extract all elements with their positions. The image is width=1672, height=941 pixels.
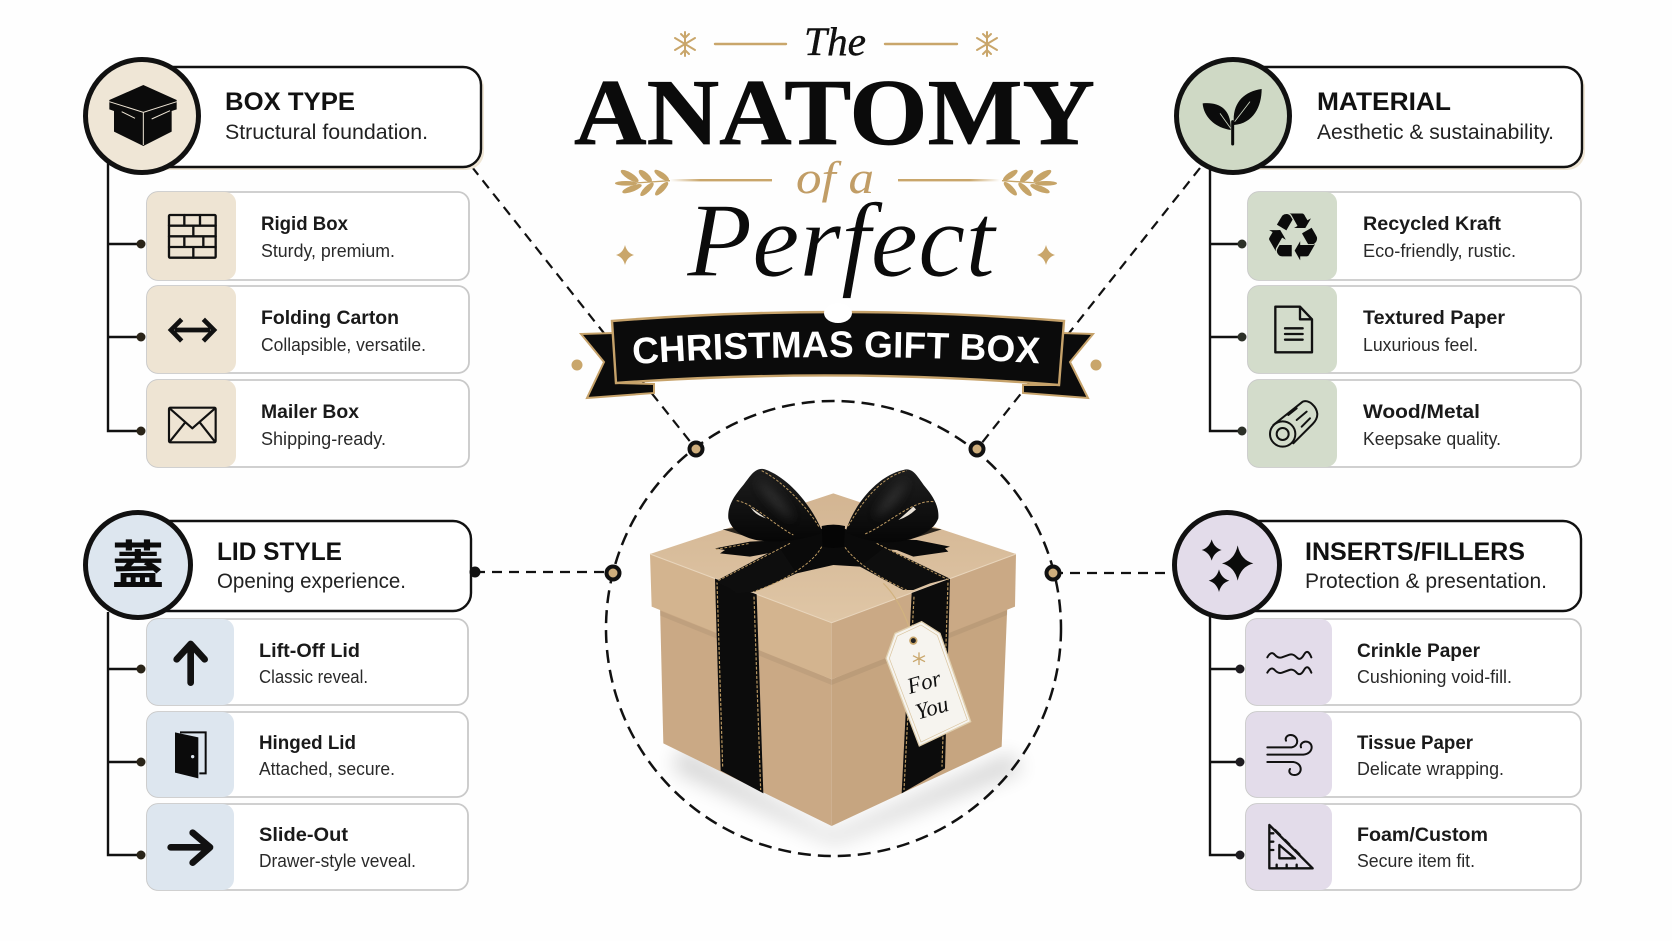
item: crinkle paper: Crinkle Paper	[1357, 640, 1480, 662]
banner: left dot	[572, 360, 582, 370]
box body left face	[660, 605, 832, 826]
icon circle	[86, 60, 198, 172]
title: ANATOMY: ANATOMY	[574, 61, 1095, 165]
bow group	[715, 469, 950, 593]
ornament: left bauble	[616, 245, 634, 265]
item: hinged lid	[136, 712, 468, 797]
header shadow	[150, 70, 484, 170]
item: rigid box: Rigid Box	[261, 213, 348, 235]
ornament: left laurel	[615, 168, 670, 198]
ornament: right snowflake	[977, 32, 997, 56]
item: folding carton: Collapsible, versatile.	[261, 335, 426, 355]
tag: You: You	[913, 691, 951, 724]
ribbon: stitching on faces	[717, 582, 948, 790]
item: foam custom: Foam/Custom	[1357, 824, 1488, 846]
heading: MATERIAL	[1317, 88, 1451, 116]
connector nodes	[606, 442, 1060, 580]
item: rigid box	[136, 192, 469, 280]
item: tissue paper: Tissue Paper	[1357, 732, 1473, 754]
item: crinkle paper: Cushioning void-fill.	[1357, 667, 1512, 687]
icon circle	[86, 512, 190, 618]
bow: back band	[723, 525, 942, 541]
subheading: Protection & presentation.	[1305, 570, 1547, 593]
item: lift-off lid	[136, 619, 468, 705]
item: wood metal: Wood/Metal	[1363, 401, 1480, 423]
connector dot	[470, 566, 480, 578]
icon: sparkles	[1202, 539, 1253, 592]
item: recycled kraft: Recycled Kraft	[1363, 213, 1502, 235]
connector: inserts to gift circle	[1053, 572, 1172, 574]
header card	[1227, 521, 1581, 611]
banner: notch behind script	[824, 303, 852, 323]
node: right	[1046, 566, 1060, 580]
item: mailer box: Mailer Box	[261, 401, 359, 423]
header card	[142, 67, 481, 167]
banner: left tail	[581, 333, 654, 398]
dashed circle around gift	[606, 401, 1061, 856]
title: The: The	[804, 19, 866, 64]
lid top face	[650, 493, 1016, 623]
lid left skirt	[650, 554, 832, 679]
ribbon: left face band	[715, 579, 763, 793]
ornament: right laurel rule	[898, 179, 1000, 181]
ornament: right bauble	[1037, 245, 1055, 265]
item: textured paper	[1238, 286, 1581, 373]
bow: right band	[843, 543, 949, 590]
item: textured paper: Luxurious feel.	[1363, 335, 1478, 355]
bow: left tail	[715, 538, 820, 557]
item: wood metal	[1238, 380, 1581, 467]
node: top right	[970, 442, 984, 456]
item: lift-off lid: Classic reveal.	[259, 667, 368, 687]
item: foam custom: Secure item fit.	[1357, 851, 1475, 871]
banner: right tail	[1023, 333, 1093, 398]
item: mailer box	[136, 380, 469, 467]
heading: BOX TYPE	[225, 88, 355, 116]
item: rigid box: Sturdy, premium.	[261, 241, 395, 261]
item: recycled kraft	[1238, 192, 1581, 280]
item: tissue paper	[1236, 712, 1581, 797]
banner: body	[612, 312, 1064, 385]
bow: knot	[822, 525, 845, 548]
bow: left band	[715, 540, 823, 593]
item: crinkle paper	[1236, 619, 1581, 705]
title block	[574, 19, 1095, 265]
tag: For: For	[903, 665, 944, 699]
subheading: Aesthetic & sustainability.	[1317, 121, 1554, 144]
bow: stitching	[716, 471, 950, 592]
panel: inserts and fillers	[1174, 512, 1581, 890]
icon: box	[109, 85, 177, 146]
ribbon: right face band	[902, 579, 950, 793]
item: slide-out: Drawer-style veveal.	[259, 851, 416, 871]
branch lines	[1210, 160, 1242, 431]
banner: right dot	[1090, 360, 1102, 370]
bow: center backing	[777, 528, 890, 573]
tag: string	[883, 583, 913, 637]
lid edge highlight	[650, 554, 1016, 623]
branch lines	[108, 160, 141, 431]
connector: box type to gift circle	[472, 167, 696, 449]
panel: lid style	[86, 512, 480, 890]
box body right face	[832, 605, 1007, 826]
bow: right loop	[847, 469, 938, 542]
banner	[572, 310, 1102, 400]
box shadow	[673, 747, 1023, 843]
item: hinged lid: Hinged Lid	[259, 732, 356, 754]
bow: loop shine	[757, 480, 907, 520]
item: folding carton	[136, 286, 469, 373]
item: recycled kraft: Eco-friendly, rustic.	[1363, 241, 1516, 261]
ornament: right rule	[885, 43, 957, 45]
item: wood metal: Keepsake quality.	[1363, 429, 1501, 449]
lid right skirt	[832, 554, 1016, 679]
subheading: Opening experience.	[217, 570, 406, 593]
bow: right tail	[847, 538, 950, 557]
header shadow	[1240, 70, 1585, 170]
bow: loop openings	[751, 507, 916, 520]
item: slide-out: Slide-Out	[259, 824, 349, 846]
icon circle	[1174, 512, 1280, 618]
item: recycled kraft: ♻	[1263, 199, 1323, 276]
item: textured paper: Textured Paper	[1363, 307, 1505, 329]
item: folding carton: Folding Carton	[261, 307, 399, 329]
connector: material to gift circle	[977, 168, 1200, 449]
banner: text: CHRISTMAS GIFT BOX	[634, 331, 1040, 364]
gift box illustration	[650, 469, 1023, 843]
branch lines	[108, 612, 141, 855]
branch lines	[1210, 612, 1240, 855]
ornament: left rule	[715, 43, 786, 45]
header card	[1233, 67, 1582, 167]
lid undershadow	[660, 610, 1007, 685]
item: slide-out	[136, 804, 468, 890]
item: lift-off lid: Lift-Off Lid	[259, 640, 360, 662]
item: mailer box: Shipping-ready.	[261, 429, 386, 449]
ornament: left laurel rule	[670, 179, 772, 181]
header card	[138, 521, 471, 611]
tag: hole	[910, 637, 917, 644]
node: top left	[690, 442, 702, 456]
icon: leaf	[1203, 89, 1262, 144]
title: of a: of a	[796, 152, 874, 203]
heading: INSERTS/FILLERS	[1305, 538, 1525, 566]
node: left	[606, 566, 620, 580]
connector: lid style to gift circle	[475, 571, 613, 573]
ornament: right laurel	[1002, 168, 1057, 198]
heading: LID STYLE	[217, 538, 342, 566]
bow: left loop	[728, 469, 822, 542]
item: hinged lid: Attached, secure.	[259, 759, 395, 779]
subheading: Structural foundation.	[225, 121, 428, 144]
tag: card	[886, 622, 971, 746]
item: tissue paper: Delicate wrapping.	[1357, 759, 1504, 779]
icon circle	[1176, 60, 1290, 172]
item: foam custom	[1236, 804, 1581, 890]
ornament: left snowflake	[675, 32, 695, 56]
tag: snowflake	[913, 652, 925, 665]
panel: material	[1176, 60, 1585, 467]
panel: box type	[86, 60, 484, 467]
tag: inner border	[889, 625, 967, 742]
icon: lid glyph: 蓋	[112, 524, 164, 599]
title: Perfect script: Perfect	[686, 182, 998, 299]
